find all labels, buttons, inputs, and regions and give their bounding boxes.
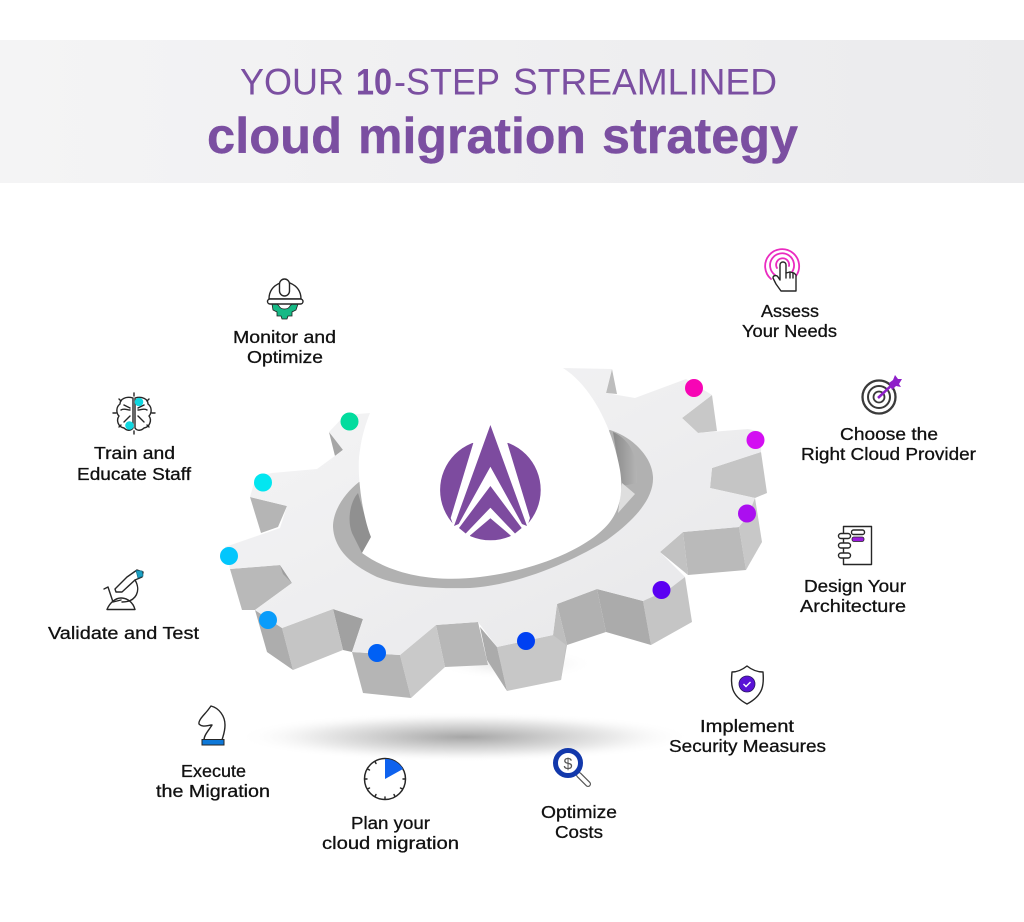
label: Assess <box>761 301 819 321</box>
label: Train and <box>94 443 175 463</box>
title line one: STREAMLINED <box>513 62 777 102</box>
step dots <box>220 379 764 662</box>
step: design your architecture <box>800 526 906 616</box>
gear side walls <box>230 369 767 698</box>
title line two: strategy <box>602 108 798 164</box>
label: Costs <box>555 822 603 842</box>
step: optimize costs <box>541 750 617 842</box>
label <box>742 301 837 341</box>
gear inner wall left <box>350 493 371 553</box>
title line one: -STEP <box>394 62 500 102</box>
label: Security Measures <box>669 736 826 756</box>
icon: clock <box>364 758 406 800</box>
label <box>233 327 336 367</box>
label: Implement <box>700 716 794 736</box>
label: Educate Staff <box>77 464 191 484</box>
step: plan your cloud migration <box>322 758 459 853</box>
label: Design Your <box>804 576 906 596</box>
label: Plan your <box>351 813 430 833</box>
step: choose the right cloud provider <box>801 375 976 464</box>
title line two: migration <box>358 108 586 164</box>
label: Execute <box>181 761 246 781</box>
title line one <box>240 62 777 102</box>
icon: brain <box>113 393 155 434</box>
icon: microscope <box>104 570 143 610</box>
label <box>77 443 191 484</box>
icon: chess knight <box>199 706 225 745</box>
title line one: YOUR <box>240 62 344 102</box>
step: train and educate staff <box>77 393 191 484</box>
title line two <box>207 108 798 164</box>
label: Choose the <box>840 424 938 444</box>
icon: helmet with gear <box>268 279 303 319</box>
icon: magnifier with dollar: $ <box>564 756 573 773</box>
gear <box>220 367 767 698</box>
icon: touch hand <box>765 249 799 291</box>
gear inner wall right <box>613 432 637 486</box>
gear top face <box>225 368 762 655</box>
title line one: 10 <box>356 62 392 102</box>
label <box>669 716 826 756</box>
step: implement security measures <box>669 666 826 756</box>
label: Monitor and <box>233 327 336 347</box>
step: monitor and optimize <box>233 279 336 367</box>
label <box>156 761 270 801</box>
title line two: cloud <box>207 108 342 164</box>
label: the Migration <box>156 781 270 801</box>
label: Right Cloud Provider <box>801 444 976 464</box>
icon: target with dart <box>862 375 902 414</box>
step: execute the migration <box>156 706 270 801</box>
label <box>801 424 976 464</box>
label: Your Needs <box>742 321 837 341</box>
logo <box>440 425 541 540</box>
label: Validate and Test <box>48 623 199 643</box>
step: assess your needs <box>742 249 837 341</box>
label: Optimize <box>247 347 323 367</box>
label: cloud migration <box>322 833 459 853</box>
ground shadow <box>237 648 693 762</box>
header banner <box>0 40 1024 183</box>
label: Architecture <box>800 596 906 616</box>
label <box>322 813 459 853</box>
label <box>541 802 617 842</box>
icon: notebook <box>838 526 872 564</box>
gear inner highlight <box>618 483 635 513</box>
icon: shield <box>732 666 763 704</box>
gear centre ring <box>333 430 653 588</box>
label <box>800 576 906 616</box>
label: Optimize <box>541 802 617 822</box>
white dome <box>359 367 621 579</box>
step: validate and test <box>48 570 199 643</box>
